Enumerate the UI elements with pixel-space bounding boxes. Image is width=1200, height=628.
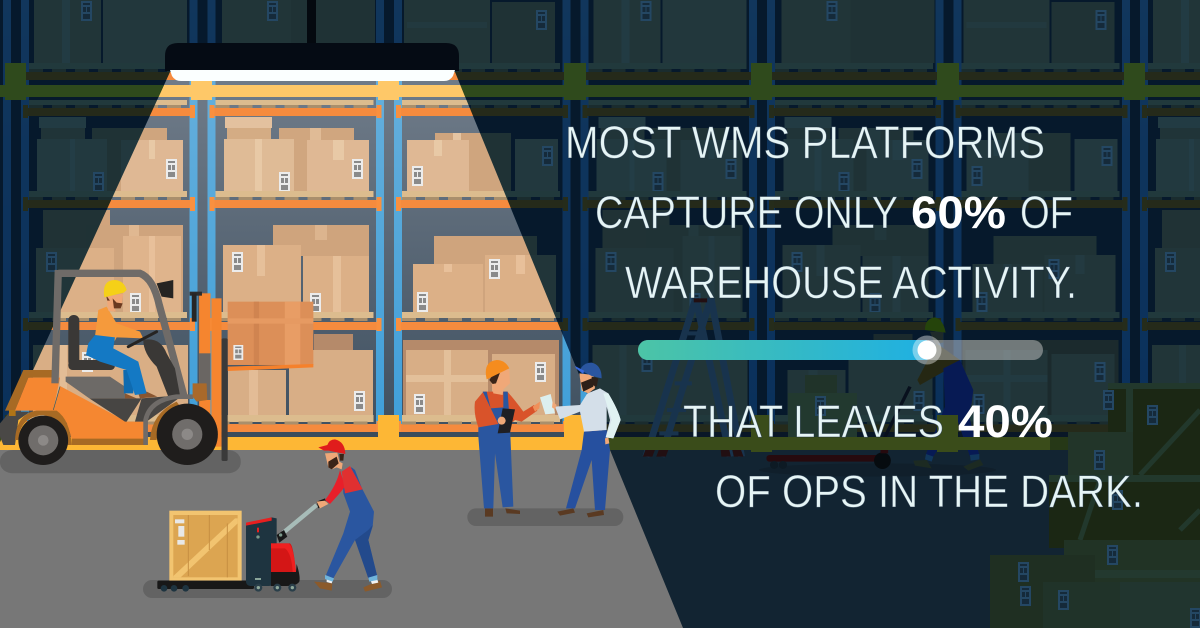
front wheel xyxy=(157,404,218,465)
lifted cardboard box xyxy=(228,302,313,371)
chassis, seat, driver, cage xyxy=(0,270,207,445)
forklift shadow xyxy=(0,450,241,473)
hand pallet jack in the dark xyxy=(759,387,996,477)
fork bracket xyxy=(193,383,207,402)
jack shadow xyxy=(143,580,392,598)
dark side boxes behind text xyxy=(788,375,857,450)
roll cage xyxy=(55,270,184,396)
stacked crates and boxes, lower right xyxy=(990,383,1200,628)
headline text: 60% xyxy=(911,187,1006,238)
step ladder xyxy=(643,298,744,457)
electric pallet jack with crate xyxy=(157,498,327,592)
forklift with driver and pallet box xyxy=(0,270,313,473)
overhead lamp xyxy=(165,0,459,81)
rear wheel arch xyxy=(15,411,72,445)
closing text xyxy=(683,396,1143,517)
paper xyxy=(540,394,555,414)
seat base xyxy=(66,377,125,398)
shadow xyxy=(467,508,623,526)
cab lamp xyxy=(157,280,173,298)
steering column xyxy=(143,339,180,397)
mast xyxy=(190,292,228,461)
warehouse floor xyxy=(0,450,1200,628)
headline text xyxy=(565,117,1077,308)
closing text: THAT LEAVES xyxy=(683,396,944,447)
front wheel arch xyxy=(146,397,193,445)
wooden crate xyxy=(169,511,242,581)
warehouse racking background xyxy=(0,0,1200,452)
headline text: MOST WMS PLATFORMS xyxy=(565,117,1045,168)
driver xyxy=(86,280,157,398)
closing text: OF OPS IN THE DARK. xyxy=(715,466,1143,517)
worker pushing jack xyxy=(314,439,382,592)
headline text: WAREHOUSE ACTIVITY. xyxy=(625,257,1077,308)
closing text: 40% xyxy=(958,396,1053,447)
worker with blue cap xyxy=(552,363,621,517)
orange body xyxy=(15,378,147,439)
cab rear panel xyxy=(5,370,53,411)
cab floor xyxy=(89,395,183,422)
jack body xyxy=(157,498,327,592)
progress slider at 60% xyxy=(638,336,1043,364)
rear counterweight xyxy=(0,412,30,445)
dimmed yellow beams outside the cone xyxy=(0,63,1200,452)
worker in the dark xyxy=(913,317,983,471)
worker with clipboard xyxy=(475,360,540,517)
seat xyxy=(68,315,115,370)
two workers talking xyxy=(467,360,623,526)
rear wheel xyxy=(18,416,68,465)
headline text: OF xyxy=(1020,187,1073,238)
headline text: CAPTURE ONLY xyxy=(595,187,898,238)
